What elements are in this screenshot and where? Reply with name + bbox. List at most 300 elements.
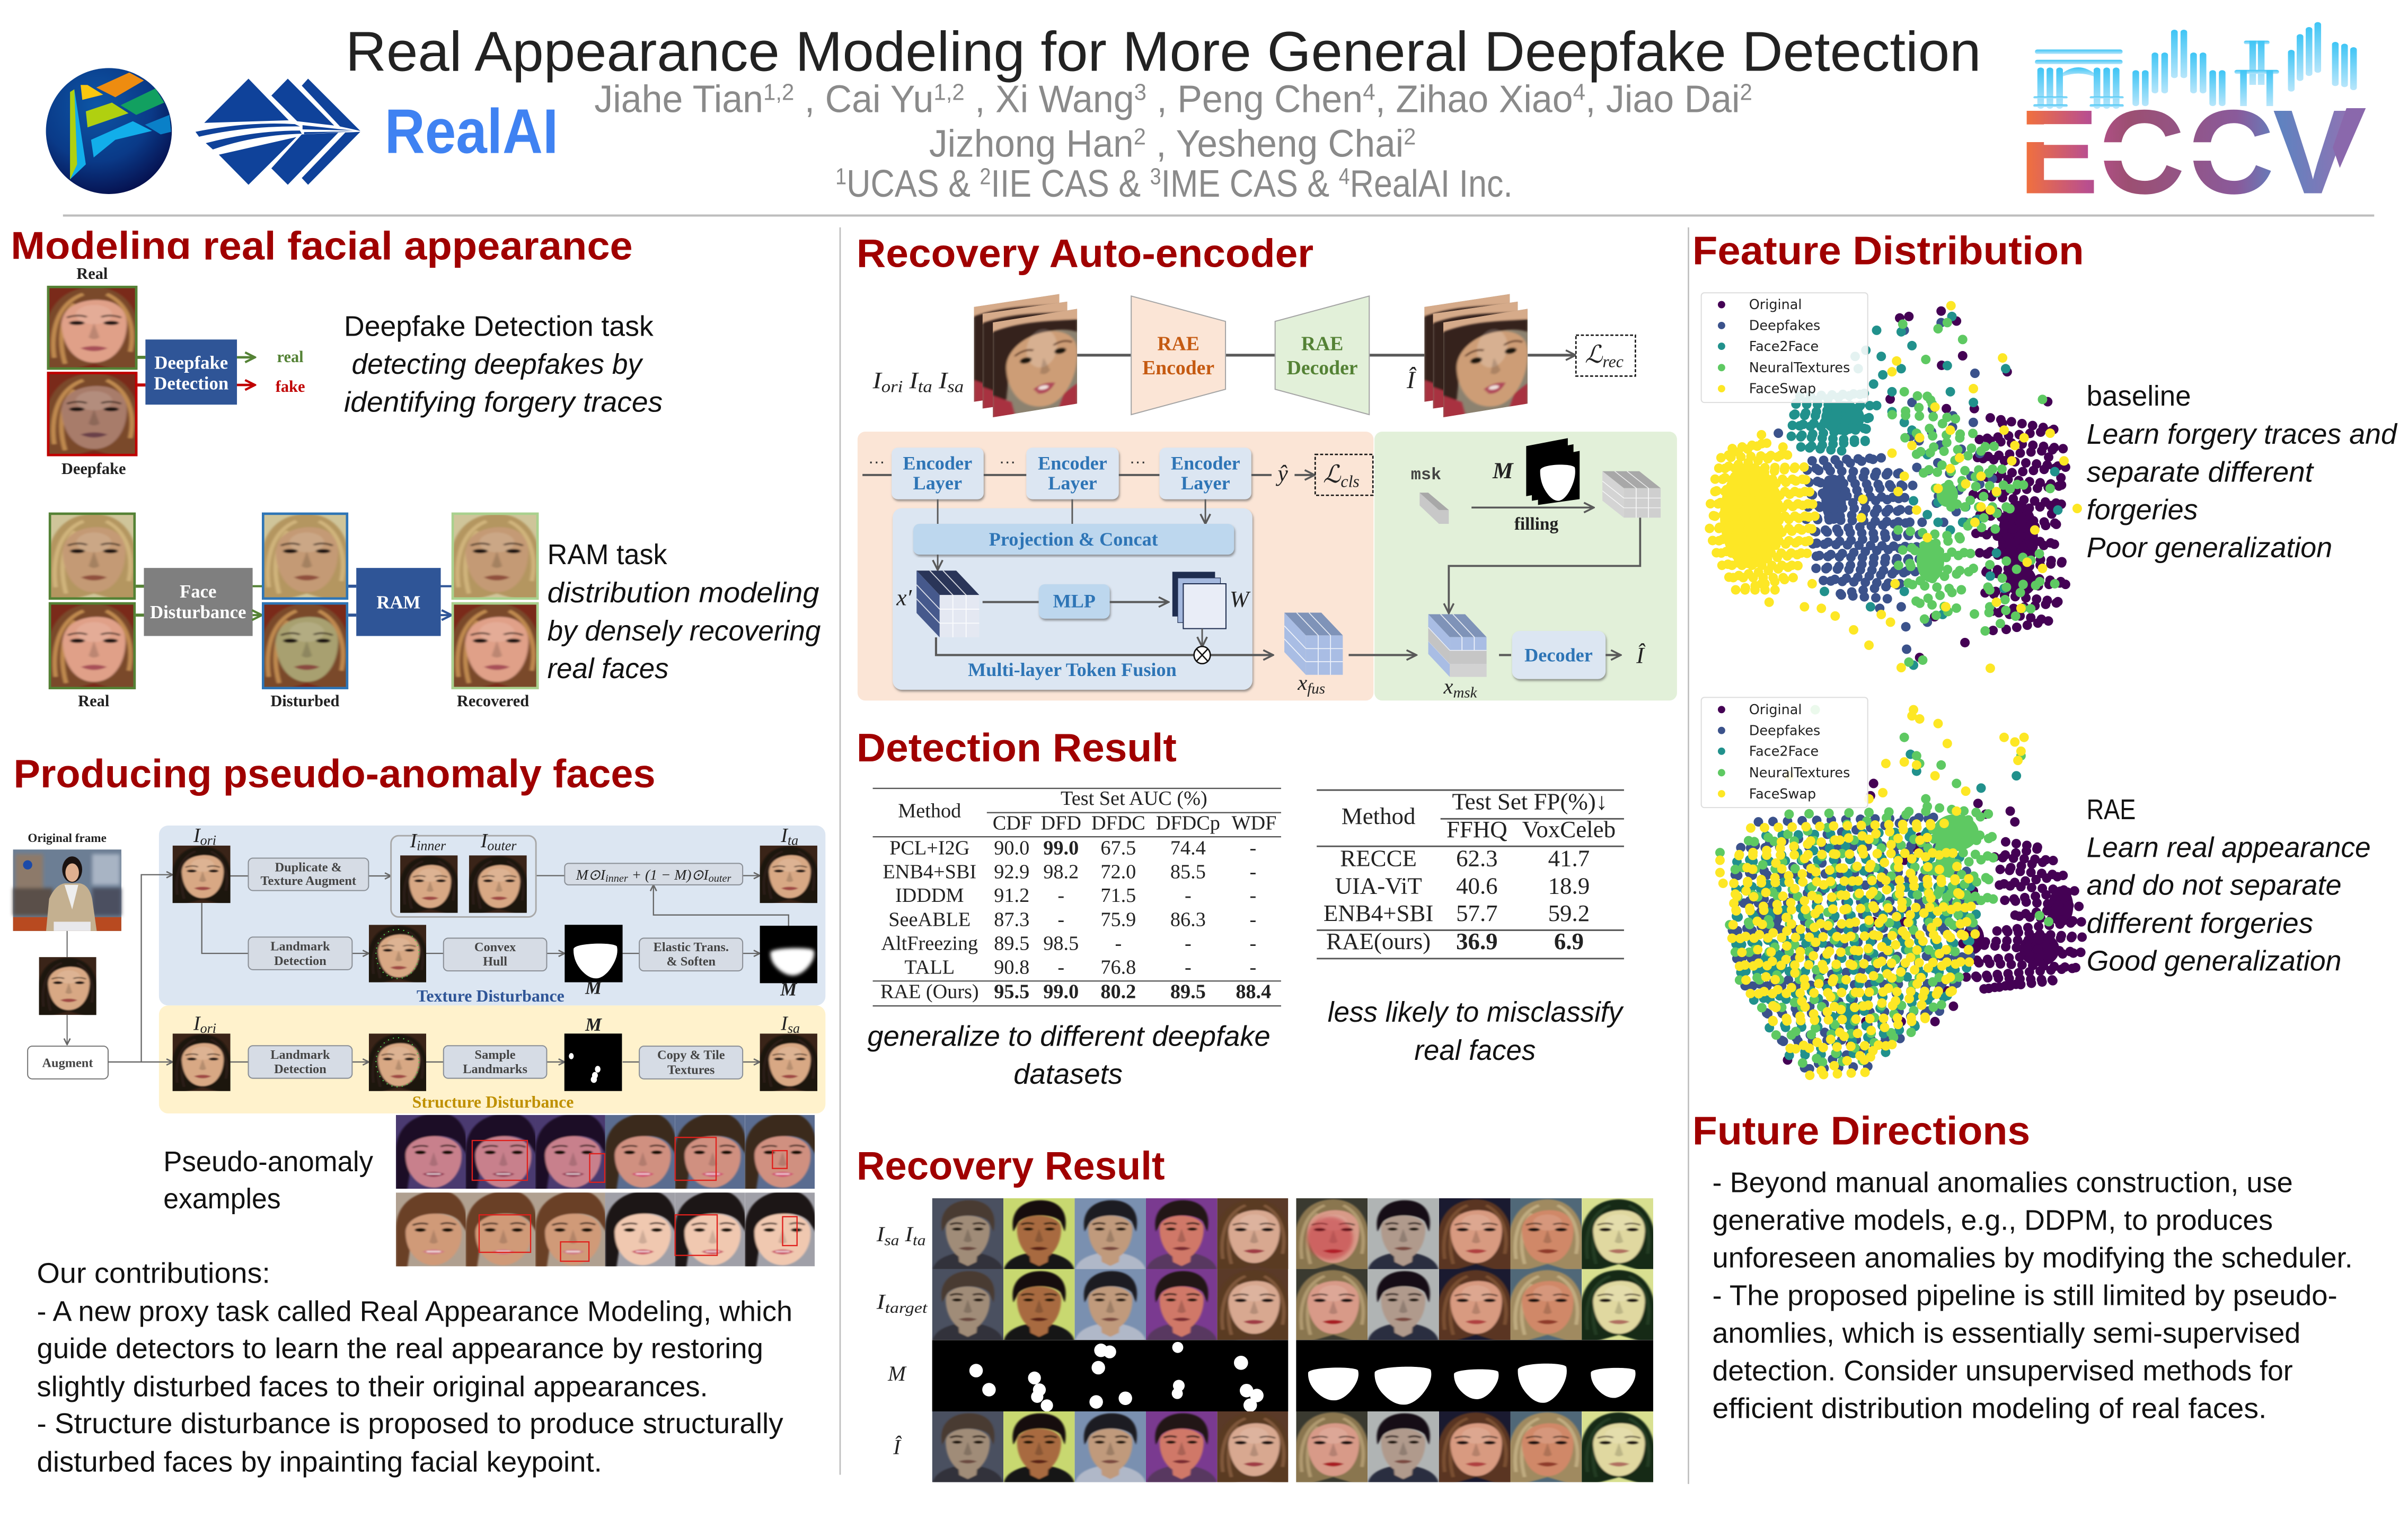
diagram: RAE overview: ori bbox=[881, 377, 903, 396]
text: RAM task: real faces bbox=[548, 653, 668, 684]
row labels: recovery result: I bbox=[877, 1290, 884, 1314]
text: future directions: - Beyond manual anomalies construction, use bbox=[1713, 1166, 2293, 1198]
text: future directions bbox=[1713, 1166, 2353, 1424]
legend: RAE: NeuralTextures bbox=[1749, 765, 1850, 781]
image grid: texture recovery bbox=[1293, 1198, 1657, 1485]
authors: Jizhong Han bbox=[929, 122, 1142, 165]
authors: 3 bbox=[1134, 80, 1146, 105]
panel: deepfake detection task: Real bbox=[76, 265, 108, 283]
text: future directions: unforeseen anomalies by modifying the scheduler. bbox=[1713, 1242, 2353, 1274]
table: test set FP: 62.3 bbox=[1456, 845, 1498, 871]
text: baseline: forgeries bbox=[2087, 494, 2198, 525]
landmark detection step: Detection bbox=[274, 954, 327, 968]
table: test set AUC: DFDC bbox=[1091, 812, 1145, 835]
table: test set AUC: AltFreezing bbox=[881, 932, 978, 954]
texture row faces and masks: I bbox=[481, 830, 487, 852]
panel: texture disturbance bbox=[159, 826, 825, 1005]
table: test set AUC: 90.8 bbox=[994, 956, 1029, 978]
text: RAM task bbox=[548, 539, 821, 684]
augment box bbox=[28, 1046, 108, 1079]
panel: multi-layer token fusion encoder: fus bbox=[1307, 680, 1325, 697]
panel: deepfake detection task: Deepfake bbox=[61, 460, 126, 478]
table: test set AUC: 67.5 bbox=[1100, 837, 1136, 859]
authors: 4 bbox=[1339, 164, 1350, 190]
row labels: recovery result: ta bbox=[913, 1232, 926, 1249]
text: our contributions bbox=[37, 1257, 792, 1478]
panel: RAM task: Disturbed bbox=[270, 692, 340, 710]
heading: Future Directions: Future Directions bbox=[1692, 1109, 2030, 1153]
RAM box: RAM bbox=[376, 592, 420, 612]
x_fus tensor bbox=[1284, 612, 1343, 675]
table: test set AUC: TALL bbox=[904, 956, 955, 978]
RAE encoder: RAE bbox=[1157, 333, 1199, 355]
encoder layers: Layer bbox=[913, 472, 962, 494]
authors: 1 bbox=[835, 164, 846, 190]
heading: Modeling real facial appearance: Modeling real facial appearance bbox=[11, 224, 633, 268]
authors bbox=[594, 78, 1752, 205]
authors: Jiahe Tian bbox=[594, 78, 769, 121]
authors: 1,2 bbox=[763, 80, 794, 105]
reconstruction loss bbox=[1576, 335, 1635, 376]
panel: deepfake detection task bbox=[42, 265, 305, 478]
text: future directions: efficient distribution modeling of real faces. bbox=[1713, 1392, 2266, 1424]
diagram: augmentation pipeline: Texture Disturbance bbox=[417, 987, 564, 1005]
panel: deepfake detection task: fake bbox=[276, 378, 305, 396]
logo: blue arrow emblem bbox=[196, 78, 360, 185]
table: test set FP: 41.7 bbox=[1548, 845, 1590, 871]
logo: ECCV: V bbox=[2273, 84, 2353, 218]
table: test set FP: FFHQ bbox=[1446, 816, 1507, 843]
logo: ECCV: C bbox=[2098, 84, 2185, 218]
text: pseudo-anomaly examples: Pseudo-anomaly bbox=[163, 1146, 373, 1178]
table: test set AUC: - bbox=[1250, 837, 1256, 859]
heading: Recovery Result: Recovery Result bbox=[857, 1144, 1165, 1188]
elastic trans step: Elastic Trans. bbox=[654, 940, 729, 954]
sample landmarks step: Sample bbox=[475, 1048, 516, 1062]
encoder layers: Encoder bbox=[1038, 453, 1107, 474]
caption: less likely: real faces bbox=[1414, 1034, 1536, 1066]
table: test set AUC: - bbox=[1185, 884, 1192, 907]
text: our contributions: Our contributions: bbox=[37, 1257, 270, 1289]
elastic trans step bbox=[639, 938, 743, 971]
authors: , Cai Yu bbox=[794, 78, 933, 121]
text: baseline: baseline bbox=[2087, 380, 2191, 412]
table: test set AUC: 72.0 bbox=[1100, 861, 1136, 883]
table: test set AUC: - bbox=[1185, 956, 1192, 978]
diagram: RAE overview: I bbox=[903, 367, 919, 393]
blending formula: M⊙I bbox=[576, 866, 605, 883]
table: test set AUC: - bbox=[1250, 956, 1256, 978]
table: test set AUC: 87.3 bbox=[994, 908, 1029, 931]
table: test set AUC: 89.5 bbox=[1170, 980, 1206, 1003]
face disturbance box bbox=[144, 568, 253, 636]
RAE encoder bbox=[1131, 296, 1225, 415]
token fusion module bbox=[893, 499, 1273, 690]
diagram: RAE overview bbox=[872, 294, 1635, 424]
disturbed faces bbox=[258, 513, 352, 692]
encoder layers: Encoder bbox=[903, 453, 972, 474]
table: test set AUC: DFD bbox=[1041, 812, 1081, 835]
text: baseline: Learn forgery traces and bbox=[2087, 418, 2398, 450]
table: test set AUC: 88.4 bbox=[1236, 980, 1271, 1003]
legend: RAE: Face2Face bbox=[1749, 744, 1819, 760]
input face stack bbox=[974, 294, 1077, 424]
structure row faces and masks: I bbox=[781, 1012, 788, 1034]
panel: multi-layer token fusion encoder: ··· bbox=[1130, 452, 1146, 471]
copy and tile step: Copy & Tile bbox=[657, 1048, 725, 1063]
table: test set AUC: RAE (Ours) bbox=[880, 980, 979, 1003]
legend: RAE: FaceSwap bbox=[1749, 786, 1816, 802]
convex hull step bbox=[444, 938, 546, 971]
landmark detection step 2: Landmark bbox=[270, 1048, 330, 1062]
sample landmarks step bbox=[444, 1046, 546, 1078]
text: deepfake detection task bbox=[344, 311, 663, 418]
text: future directions: detection. Consider unsupervised methods for bbox=[1713, 1355, 2293, 1386]
table: test set AUC: 76.8 bbox=[1100, 956, 1136, 978]
texture row faces and masks: ta bbox=[788, 833, 798, 848]
text: RAE: and do not separate bbox=[2087, 870, 2342, 901]
table: test set AUC: 86.3 bbox=[1170, 908, 1206, 931]
original video frame bbox=[13, 849, 121, 931]
mask stack bbox=[1526, 438, 1580, 505]
diagram: augmentation pipeline: Structure Disturbance bbox=[412, 1093, 574, 1111]
image grid: structure recovery bbox=[932, 1198, 1292, 1485]
text: RAM task: RAM task bbox=[548, 539, 667, 571]
text: baseline bbox=[2087, 380, 2398, 564]
row labels: recovery result: I bbox=[899, 1222, 914, 1246]
table: test set AUC: - bbox=[1250, 908, 1256, 931]
cropped face bbox=[36, 957, 99, 1017]
deepfake face bbox=[42, 372, 142, 459]
reconstruction loss: rec bbox=[1602, 352, 1624, 371]
structure row faces and masks: M bbox=[585, 1014, 602, 1035]
authors: 4 bbox=[1573, 80, 1585, 105]
text: RAM task: distribution modeling bbox=[548, 577, 819, 609]
table: test set AUC: 90.0 bbox=[994, 837, 1029, 859]
table: test set FP: 40.6 bbox=[1456, 872, 1498, 899]
chart: RAE t-SNE scatter bbox=[1720, 710, 2083, 1075]
legend: baseline: Original bbox=[1749, 297, 1802, 313]
authors: , Xi Wang bbox=[965, 78, 1134, 121]
authors: , Zihao Xiao bbox=[1375, 78, 1573, 121]
texture row faces and masks: I bbox=[193, 824, 200, 847]
table: test set FP: VoxCeleb bbox=[1522, 816, 1616, 843]
diagram: RAE overview: ta bbox=[918, 377, 932, 396]
authors: 4 bbox=[1363, 80, 1375, 105]
texture row faces and masks bbox=[170, 824, 820, 1000]
table: test set AUC: - bbox=[1057, 884, 1064, 907]
panel: mask filling decoder: msk bbox=[1411, 465, 1441, 485]
table: test set FP: RAE(ours) bbox=[1326, 928, 1431, 954]
caption: generalize: datasets bbox=[1013, 1058, 1123, 1090]
panel: RAM task: Recovered bbox=[457, 692, 529, 710]
deepfake detection box: Detection bbox=[154, 373, 228, 393]
text: RAM task: by densely recovering bbox=[548, 615, 821, 647]
elastic trans step: & Soften bbox=[667, 954, 716, 969]
table: test set AUC: 95.5 bbox=[994, 980, 1029, 1003]
table: test set AUC: - bbox=[1185, 932, 1192, 954]
recovered faces bbox=[447, 513, 543, 692]
authors: 2 bbox=[1404, 124, 1416, 150]
texture row faces and masks: I bbox=[410, 830, 417, 852]
encoder layers: Layer bbox=[1048, 472, 1097, 494]
RAE decoder: Decoder bbox=[1287, 357, 1358, 379]
authors: , Jiao Dai bbox=[1585, 78, 1740, 121]
texture row faces and masks: I bbox=[781, 824, 788, 847]
text: our contributions: slightly disturbed faces to their original appearances. bbox=[37, 1371, 708, 1403]
blending formula: outer bbox=[709, 873, 731, 884]
table: test set AUC: 99.0 bbox=[1043, 980, 1079, 1003]
copy and tile step: Textures bbox=[667, 1063, 715, 1077]
structure row faces and masks bbox=[170, 1012, 820, 1093]
table: test set FP: Test Set FP(%)↓ bbox=[1452, 788, 1608, 814]
texture row faces and masks: inner bbox=[417, 838, 446, 854]
authors: 3 bbox=[1150, 164, 1161, 190]
decoder box bbox=[1512, 631, 1606, 679]
row labels: recovery result: I bbox=[877, 1222, 884, 1246]
table: test set AUC: - bbox=[1250, 932, 1256, 954]
table: test set AUC: 75.9 bbox=[1100, 908, 1136, 931]
token fusion module: Projection & Concat bbox=[989, 529, 1158, 550]
header rule bbox=[63, 214, 2374, 217]
text: RAE bbox=[2087, 794, 2371, 977]
copy and tile step bbox=[639, 1046, 743, 1079]
table: test set AUC: 91.2 bbox=[994, 884, 1029, 907]
caption: less likely: less likely to misclassify bbox=[1328, 996, 1624, 1028]
authors: , Peng Chen bbox=[1146, 78, 1363, 121]
table: test set FP: ENB4+SBI bbox=[1324, 900, 1433, 926]
real face bbox=[42, 286, 142, 373]
text: baseline: separate different bbox=[2087, 456, 2314, 488]
table: test set AUC: 71.5 bbox=[1100, 884, 1136, 907]
diagram: RAE overview: sa bbox=[947, 377, 964, 396]
panel: multi-layer token fusion encoder: ··· bbox=[999, 452, 1016, 471]
token fusion module: Multi-layer Token Fusion bbox=[968, 659, 1177, 680]
legend: baseline bbox=[1701, 293, 1868, 402]
panel: structure disturbance bbox=[159, 1005, 825, 1113]
duplicate and texture augment step bbox=[248, 858, 368, 891]
table: test set AUC: - bbox=[1057, 956, 1064, 978]
row labels: recovery result: sa bbox=[884, 1232, 899, 1249]
row labels: recovery result: Î bbox=[893, 1435, 902, 1459]
table: test set AUC: IDDDM bbox=[895, 884, 964, 907]
table: test set FP: 59.2 bbox=[1548, 900, 1590, 926]
structure row faces and masks: sa bbox=[788, 1021, 800, 1036]
panel: mask filling decoder: x bbox=[1443, 674, 1453, 698]
texture row faces and masks: outer bbox=[487, 838, 517, 854]
panel: mask filling decoder: M bbox=[1492, 458, 1514, 484]
panel: mask filling decoder: filling bbox=[1514, 514, 1558, 534]
encoder layers: Layer bbox=[1181, 472, 1230, 494]
table: test set AUC: 98.2 bbox=[1043, 861, 1079, 883]
text: future directions: anomlies, which is essentially semi-supervised bbox=[1713, 1317, 2300, 1349]
augment box: Augment bbox=[42, 1056, 93, 1070]
deepfake detection box bbox=[145, 339, 237, 405]
text: pseudo-anomaly examples: examples bbox=[163, 1183, 281, 1215]
panel: mask filling decoder: msk bbox=[1453, 684, 1478, 701]
text: deepfake detection task: Deepfake Detection task bbox=[344, 311, 654, 343]
text: deepfake detection task: identifying forgery traces bbox=[344, 386, 663, 418]
legend: baseline: Deepfakes bbox=[1749, 318, 1820, 334]
chart: baseline t-SNE scatter bbox=[1709, 306, 2077, 668]
table: test set AUC: 98.5 bbox=[1043, 932, 1079, 954]
table: test set AUC: 99.0 bbox=[1043, 837, 1079, 859]
sample landmarks step: Landmarks bbox=[463, 1062, 527, 1076]
logo: ECCV: E bbox=[2019, 84, 2098, 218]
structure row faces and masks: ori bbox=[200, 1021, 216, 1036]
RAE decoder bbox=[1275, 296, 1369, 415]
caption: less likely bbox=[1328, 996, 1624, 1066]
table: test set AUC: ENB4+SBI bbox=[883, 861, 976, 883]
heading: Producing pseudo-anomaly faces: Producing pseudo-anomaly faces bbox=[13, 751, 656, 796]
x_msk tensor bbox=[1428, 614, 1487, 677]
reconstruction loss: ℒ bbox=[1585, 341, 1602, 368]
panel: multi-layer token fusion encoder: ŷ bbox=[1275, 461, 1288, 486]
table: test set AUC bbox=[873, 787, 1281, 1006]
panel: mask filling decoder: Î bbox=[1636, 643, 1646, 669]
diagram: RAE overview: I bbox=[932, 367, 948, 393]
panel: deepfake detection task: real bbox=[277, 348, 304, 366]
table: test set AUC: 92.9 bbox=[994, 861, 1029, 883]
duplicate and texture augment step: Duplicate & bbox=[275, 861, 342, 875]
diagram: RAE overview: I bbox=[873, 367, 881, 393]
text: our contributions: guide detectors to learn the real appearance by restoring bbox=[37, 1332, 763, 1364]
RAM box bbox=[356, 568, 441, 636]
table: test set AUC: CDF bbox=[993, 812, 1032, 835]
table: test set FP: 57.7 bbox=[1456, 900, 1498, 926]
texture row faces and masks: M bbox=[585, 978, 602, 998]
panel: multi-layer token fusion encoder: x bbox=[1298, 671, 1307, 695]
encoder layers: Encoder bbox=[1171, 453, 1240, 474]
authors: 2 bbox=[1740, 80, 1752, 105]
logo: university globe flag bbox=[46, 68, 172, 194]
table: test set AUC: SeeABLE bbox=[888, 908, 971, 931]
output face stack bbox=[1424, 294, 1528, 424]
legend: RAE: Original bbox=[1749, 702, 1802, 718]
table: test set FP bbox=[1317, 788, 1624, 959]
table: test set FP: 36.9 bbox=[1456, 928, 1498, 954]
face disturbance box: Disturbance bbox=[150, 602, 246, 622]
logo: ECCV: C bbox=[2188, 84, 2274, 218]
classification loss: cls bbox=[1340, 472, 1360, 490]
legend: baseline: FaceSwap bbox=[1749, 381, 1816, 397]
legend: baseline: NeuralTextures bbox=[1749, 360, 1850, 376]
convex hull step: Convex bbox=[474, 940, 516, 954]
authors: 1,2 bbox=[933, 80, 965, 105]
authors: , Yesheng Chai bbox=[1146, 122, 1404, 165]
text: future directions: generative models, e.g., DDPM, to produces bbox=[1713, 1204, 2273, 1236]
table: test set AUC: - bbox=[1250, 861, 1256, 883]
diagram: augmentation pipeline bbox=[13, 824, 825, 1113]
text: our contributions: - A new proxy task called Real Appearance Modeling, which bbox=[37, 1296, 792, 1328]
text: RAE: RAE bbox=[2087, 794, 2136, 826]
table: test set AUC: 89.5 bbox=[994, 932, 1029, 954]
panel: RAM task bbox=[45, 513, 543, 710]
legend: RAE bbox=[1701, 697, 1868, 808]
decoder box: Decoder bbox=[1524, 645, 1593, 666]
authors: 2 bbox=[1134, 124, 1146, 150]
title: Real Appearance Modeling for More General Deepfake Detection bbox=[346, 20, 1981, 83]
table: test set FP: Method bbox=[1342, 803, 1415, 829]
authors: IME CAS & bbox=[1161, 162, 1339, 205]
encoder layers bbox=[892, 447, 1251, 499]
panel: multi-layer token fusion encoder: ··· bbox=[868, 452, 885, 471]
table: test set AUC: - bbox=[1057, 908, 1064, 931]
row labels: recovery result bbox=[876, 1222, 928, 1459]
logo: ECCV bbox=[2019, 22, 2366, 218]
table: test set AUC: - bbox=[1250, 884, 1256, 907]
token fusion module: MLP bbox=[1053, 591, 1096, 612]
face disturbance box: Face bbox=[180, 581, 216, 602]
structure row faces and masks: I bbox=[193, 1012, 200, 1034]
caption: generalize bbox=[867, 1021, 1271, 1090]
panel: mask filling decoder bbox=[1348, 432, 1677, 701]
text: pseudo-anomaly examples bbox=[163, 1146, 373, 1215]
landmark detection step bbox=[248, 937, 352, 970]
table: test set AUC: - bbox=[1115, 932, 1122, 954]
token fusion module: W bbox=[1230, 586, 1251, 612]
authors: UCAS & bbox=[846, 162, 980, 205]
text: our contributions: - Structure disturbance is proposed to produce structurally bbox=[37, 1408, 783, 1440]
text: our contributions: disturbed faces by inpainting facial keypoint. bbox=[37, 1446, 602, 1478]
table: test set AUC: 85.5 bbox=[1170, 861, 1206, 883]
text: baseline: Poor generalization bbox=[2087, 532, 2332, 564]
texture row faces and masks: M bbox=[780, 979, 797, 1000]
diagram: RAE overview: Î bbox=[1406, 367, 1417, 394]
table: test set AUC: 80.2 bbox=[1100, 980, 1136, 1003]
authors: 2 bbox=[980, 164, 991, 190]
blending formula bbox=[564, 863, 743, 885]
authors: RealAI Inc. bbox=[1350, 162, 1513, 205]
RAE encoder: Encoder bbox=[1142, 357, 1214, 379]
legend: baseline: Face2Face bbox=[1749, 339, 1819, 355]
text: RAE: different forgeries bbox=[2087, 907, 2313, 939]
landmark detection step 2: Detection bbox=[274, 1062, 327, 1076]
heading: Detection Result: Detection Result bbox=[857, 725, 1177, 770]
diagram: augmentation pipeline: Original frame bbox=[28, 831, 107, 845]
table: test set FP: 18.9 bbox=[1548, 872, 1590, 899]
texture row faces and masks: ori bbox=[200, 833, 216, 848]
text: RAE: Good generalization bbox=[2087, 945, 2342, 977]
landmark detection step: Landmark bbox=[270, 940, 330, 954]
row labels: recovery result: M bbox=[887, 1362, 907, 1385]
convex hull step: Hull bbox=[483, 954, 507, 969]
classification loss bbox=[1315, 454, 1373, 495]
legend: RAE: Deepfakes bbox=[1749, 723, 1820, 739]
table: test set AUC: DFDCp bbox=[1156, 812, 1220, 835]
row labels: recovery result: target bbox=[885, 1300, 928, 1317]
table: test set AUC: Test Set AUC (%) bbox=[1061, 787, 1207, 810]
token fusion module: x′ bbox=[896, 585, 913, 611]
caption: generalize: generalize to different deepfake bbox=[867, 1021, 1271, 1052]
mask token bbox=[1419, 493, 1449, 524]
panel: RAM task: Real bbox=[78, 692, 109, 710]
table: test set AUC: WDF bbox=[1231, 812, 1276, 835]
heading: Recovery Auto-encoder: Recovery Auto-encoder bbox=[857, 231, 1313, 275]
table: test set AUC: Method bbox=[898, 800, 961, 822]
table: test set FP: 6.9 bbox=[1554, 928, 1584, 954]
classification loss: ℒ bbox=[1323, 461, 1340, 488]
real faces bbox=[45, 513, 140, 692]
panel: multi-layer token fusion encoder bbox=[858, 432, 1373, 700]
blending formula: inner bbox=[605, 873, 628, 884]
duplicate and texture augment step: Texture Augment bbox=[261, 874, 356, 888]
text: deepfake detection task: detecting deepfakes by bbox=[351, 348, 643, 380]
text: future directions: - The proposed pipeline is still limited by pseudo- bbox=[1713, 1279, 2338, 1311]
table: test set AUC: PCL+I2G bbox=[889, 837, 969, 859]
RAE decoder: RAE bbox=[1301, 333, 1343, 355]
table: test set FP: RECCE bbox=[1340, 845, 1417, 871]
